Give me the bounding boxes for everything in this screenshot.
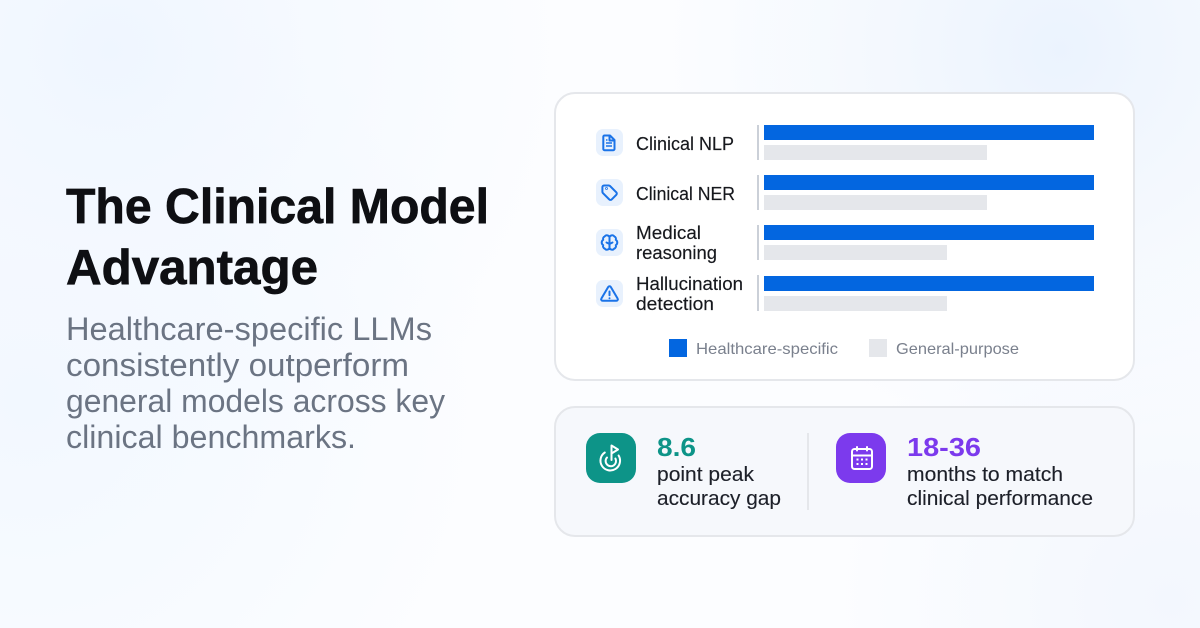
label: Clinical NER xyxy=(636,183,735,204)
subtitle text: Healthcare-specific LLMs xyxy=(66,311,432,347)
icon: brain xyxy=(596,229,623,256)
stat: months to match xyxy=(836,432,1093,510)
legend xyxy=(669,339,1019,358)
row: Hallucination detection xyxy=(596,273,1094,314)
stat description: point peak xyxy=(657,463,755,486)
label: reasoning xyxy=(636,242,717,263)
icon: warning triangle xyxy=(596,280,623,307)
panel: key stats xyxy=(555,407,1134,536)
legend: Healthcare-specific xyxy=(696,341,838,358)
bar: healthcare-specific xyxy=(764,276,1094,291)
bar: general-purpose xyxy=(764,145,987,160)
subtitle text xyxy=(66,311,445,455)
stat description xyxy=(907,463,1093,510)
row: Medical reasoning xyxy=(596,222,1094,263)
row: Clinical NER xyxy=(596,175,1094,210)
bar: general-purpose xyxy=(764,296,947,311)
icon: document xyxy=(596,129,623,156)
stat description: clinical performance xyxy=(907,487,1093,510)
stat value: 18-36 xyxy=(907,432,981,462)
stat description: months to match xyxy=(907,463,1063,486)
bar: healthcare-specific xyxy=(764,225,1094,240)
title: Advantage xyxy=(66,241,318,295)
subtitle text: general models across key xyxy=(66,383,445,419)
stat description: accuracy gap xyxy=(657,487,781,510)
bar: general-purpose xyxy=(764,195,987,210)
subtitle text: consistently outperform xyxy=(66,347,409,383)
row: Clinical NLP xyxy=(596,125,1094,160)
stat description xyxy=(657,463,781,510)
subtitle text: clinical benchmarks. xyxy=(66,419,356,455)
icon: tag xyxy=(596,179,623,206)
legend: General-purpose xyxy=(896,341,1019,358)
label: Hallucination xyxy=(636,273,743,294)
bar: healthcare-specific xyxy=(764,175,1094,190)
title xyxy=(66,180,489,295)
label xyxy=(636,222,717,263)
label: detection xyxy=(636,293,714,314)
icon: calendar xyxy=(836,433,886,483)
title: The Clinical Model xyxy=(66,180,489,234)
stat value: 8.6 xyxy=(657,432,696,462)
panel: benchmark chart xyxy=(555,93,1134,380)
icon: target with flag xyxy=(586,433,636,483)
label xyxy=(636,273,743,314)
label: Clinical NLP xyxy=(636,133,734,154)
stat: accuracy gap xyxy=(586,432,781,510)
label: Medical xyxy=(636,222,701,243)
bar: general-purpose xyxy=(764,245,947,260)
bar: healthcare-specific xyxy=(764,125,1094,140)
